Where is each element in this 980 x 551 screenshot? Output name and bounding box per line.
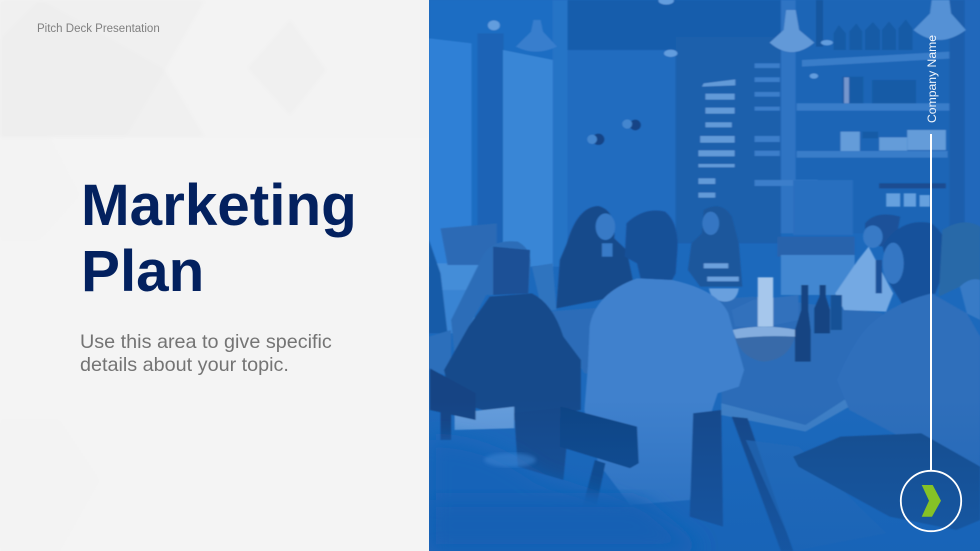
subtitle text block xyxy=(80,331,332,376)
floor xyxy=(746,440,886,551)
subtitle text block: details about your topic. xyxy=(80,354,289,376)
paper roll, bowls, bottles xyxy=(732,295,798,327)
shelves xyxy=(797,52,949,158)
woman with dark hair xyxy=(556,206,634,308)
sofa and cushion xyxy=(436,263,498,293)
panel: photo of team meeting with blue tint xyxy=(429,0,980,551)
subtitle text block: Use this area to give specific xyxy=(80,331,332,353)
title: Plan xyxy=(81,238,204,304)
woman in white right xyxy=(835,247,893,312)
woman in back xyxy=(688,206,742,287)
photo: people and table xyxy=(429,180,980,551)
woman left xyxy=(451,241,531,353)
company name vertical label: Company Name xyxy=(925,35,939,123)
title: Marketing xyxy=(81,173,357,238)
man white shirt xyxy=(584,278,744,505)
bottles xyxy=(834,19,916,103)
icon: circled green chevron xyxy=(900,470,962,532)
connector line xyxy=(930,134,932,470)
slats xyxy=(698,79,735,198)
man head xyxy=(625,211,678,280)
table xyxy=(546,297,883,430)
panel: left background xyxy=(0,0,429,551)
back rack and frame xyxy=(777,237,855,257)
photo: tint and blurred foreground xyxy=(429,0,980,551)
title xyxy=(81,173,357,304)
woman at right edge xyxy=(939,222,980,297)
photo: room background xyxy=(429,0,980,551)
chairs and legs xyxy=(430,368,476,420)
man in grey tee xyxy=(883,222,948,307)
wall dots xyxy=(488,0,833,79)
lamps xyxy=(770,10,814,52)
small label: Pitch Deck Presentation: Pitch Deck Presentation xyxy=(37,23,160,35)
